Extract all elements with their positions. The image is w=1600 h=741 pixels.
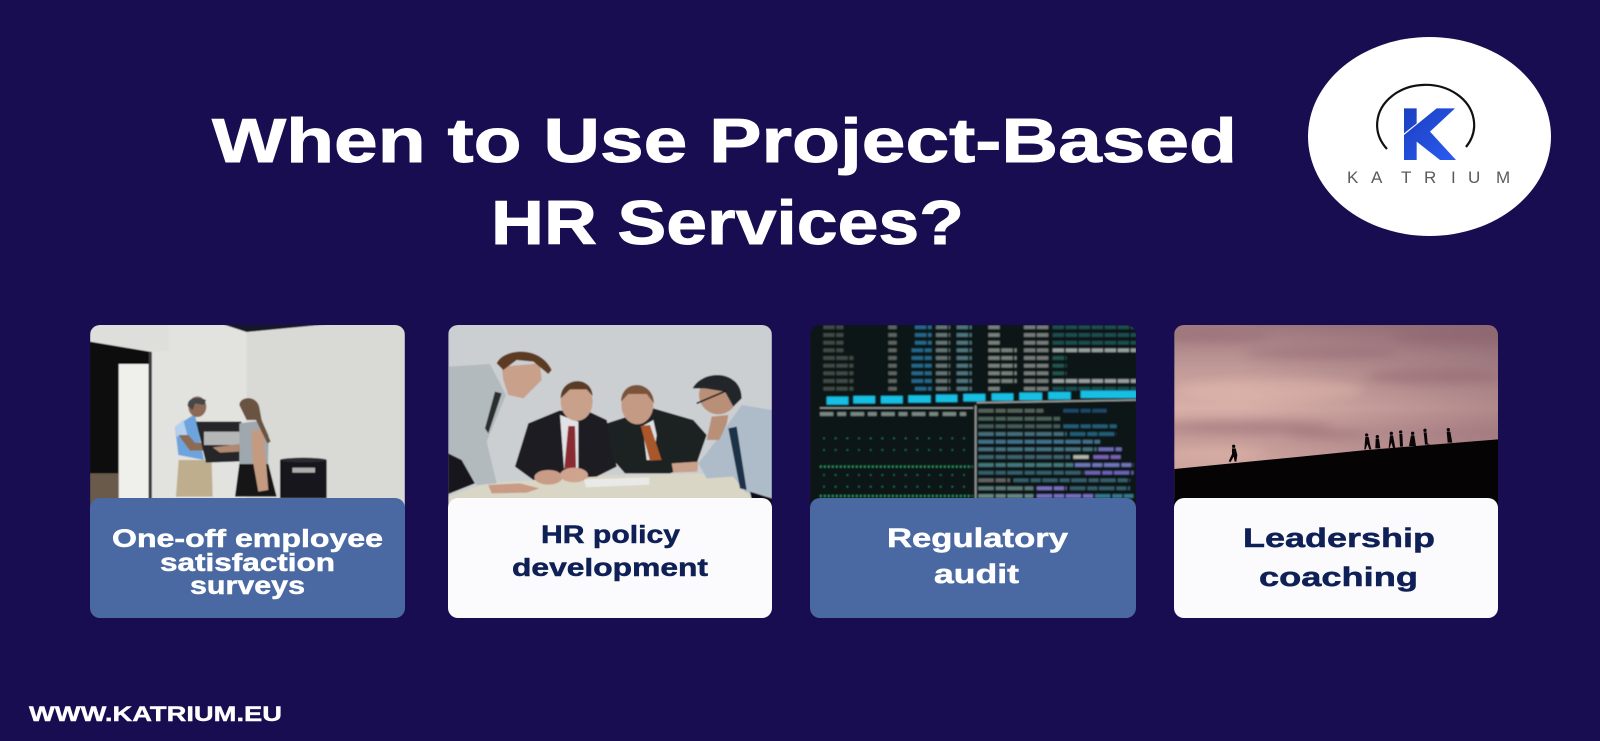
- barrel: [280, 458, 327, 498]
- title: When to Use Project-Based: [212, 107, 1237, 176]
- label text: [887, 523, 1068, 589]
- label text: audit: [934, 559, 1019, 589]
- title: HR Services?: [491, 189, 964, 258]
- footer website url: WWW.KATRIUM.EU: [29, 703, 282, 726]
- panel: HR policy development: [448, 320, 772, 618]
- icon: logo arc: [1377, 85, 1474, 149]
- label text: One-off employee: [112, 525, 383, 553]
- photo: handshake in a white room: [90, 320, 405, 507]
- man: [175, 396, 217, 497]
- label text: development: [512, 554, 709, 582]
- label text: Leadership: [1243, 523, 1435, 553]
- paper: [584, 477, 649, 487]
- hill: [1174, 439, 1498, 507]
- logo badge: [1308, 37, 1551, 236]
- panel: leadership coaching: [1157, 325, 1513, 618]
- walkers: [1229, 428, 1452, 462]
- left panel: [818, 410, 968, 418]
- function key bar: [827, 391, 1137, 405]
- black box: [196, 422, 241, 463]
- title: [212, 107, 1237, 258]
- label text: [1243, 523, 1435, 592]
- label card: [90, 498, 405, 618]
- person 4: [693, 375, 772, 507]
- photo: four colleagues at a table: [448, 320, 772, 507]
- label text: surveys: [190, 572, 305, 600]
- label text: [112, 525, 383, 600]
- photo: terminal screen: [810, 320, 1137, 507]
- label card: [1174, 498, 1498, 618]
- process table rows: [823, 327, 1136, 389]
- icon: logo letter K: [1404, 108, 1456, 160]
- logo wordmark: KATRIUM: [1347, 168, 1510, 187]
- panel: regulatory audit: [810, 320, 1137, 618]
- person 1: [448, 352, 552, 494]
- label text: HR policy: [541, 521, 680, 549]
- label text: coaching: [1259, 562, 1418, 592]
- panel: one-off employee satisfaction surveys: [90, 320, 405, 618]
- person 2: [515, 381, 617, 485]
- label text: satisfaction: [160, 549, 335, 577]
- label card: [810, 498, 1136, 618]
- photo: people walking on a hill at dusk: [1157, 325, 1513, 507]
- woman: [213, 398, 277, 497]
- label text: Regulatory: [887, 523, 1068, 553]
- label text: [512, 521, 709, 582]
- right panel: [978, 411, 1133, 496]
- panel dividers: [820, 400, 1137, 500]
- person 3: [607, 385, 707, 473]
- label card: [448, 498, 772, 618]
